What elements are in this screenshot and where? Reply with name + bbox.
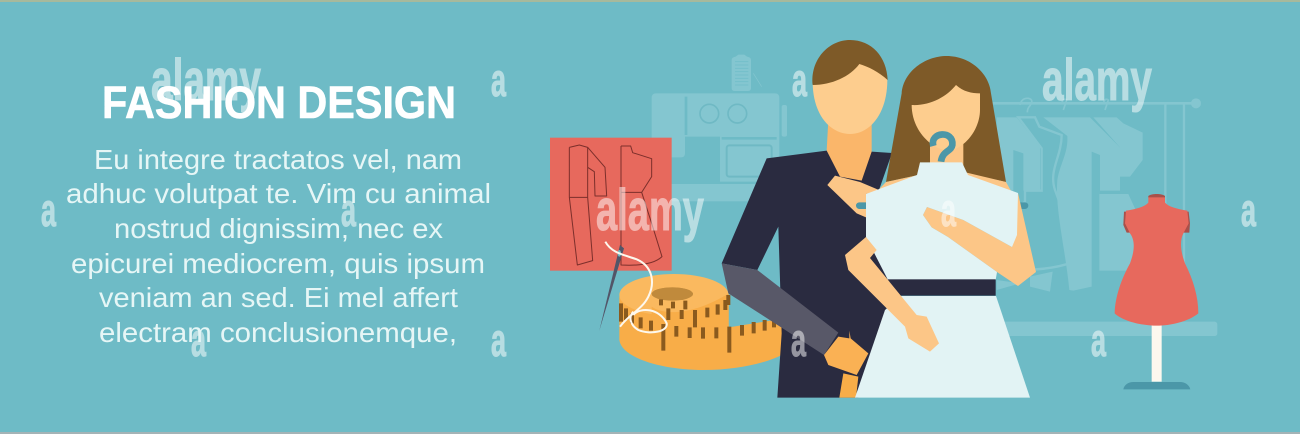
hanger hook (933, 134, 952, 162)
body text: epicurei mediocrem, quis ipsum (71, 248, 485, 279)
watermarks: alamy (1042, 48, 1152, 113)
dress bodice (866, 162, 1018, 280)
watermarks: a (1091, 314, 1106, 366)
woman far arm (923, 193, 1036, 286)
woman hair (886, 56, 1006, 182)
watermarks: alamy (151, 48, 261, 113)
body text: adhuc volutpat te. Vim cu animal (66, 178, 491, 209)
watermarks: a (191, 314, 206, 366)
body text: electram conclusionemque, (99, 317, 457, 348)
watermarks: alamy (596, 178, 704, 243)
watermarks: a (491, 314, 506, 366)
watermarks: a (791, 314, 806, 366)
watermarks (41, 48, 1256, 366)
icon: needle and thread (599, 242, 667, 332)
body text (66, 144, 491, 348)
watermarks: a (792, 54, 807, 106)
dress belt (888, 279, 996, 296)
heading: FASHION DESIGN (102, 77, 456, 128)
woman neck and shoulders (877, 140, 1013, 197)
man neck (827, 120, 872, 182)
watermarks: a (341, 184, 356, 236)
icon: sewing machine background (640, 55, 787, 201)
figure: tailor man (722, 40, 903, 398)
watermarks: a (41, 184, 56, 236)
man head (813, 60, 887, 134)
body text: nostrud dignissim, nec ex (114, 213, 443, 244)
watermarks: a (491, 54, 506, 106)
dress skirt (855, 296, 1030, 398)
figure: woman with dress form (845, 56, 1036, 398)
woman face (912, 85, 980, 151)
body text: Eu integre tractatos vel, nam (94, 144, 462, 175)
icon: measuring tape (619, 274, 785, 370)
icon: clothes rack background (900, 98, 1217, 336)
man sleeve (722, 263, 838, 355)
hanger bar (859, 196, 1025, 216)
panel: garment pattern sheet (550, 138, 672, 271)
man hair (812, 40, 888, 85)
woman near arm (845, 237, 939, 352)
watermarks: a (1241, 184, 1256, 236)
icon: red dress mannequin (1115, 194, 1198, 389)
man hand and tape (824, 331, 868, 375)
watermarks: a (941, 184, 956, 236)
body text: veniam an sed. Ei mel affert (99, 282, 458, 313)
man hand on shoulder (827, 176, 879, 217)
man jacket (722, 151, 903, 398)
